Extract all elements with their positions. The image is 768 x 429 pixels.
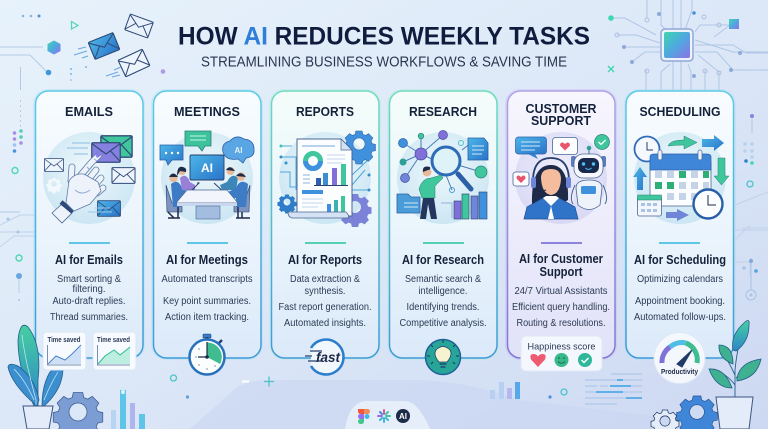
card title: Support [540,265,583,279]
bullet list: Thread summaries. [50,312,128,323]
bullet list: intelligence. [418,286,468,297]
bullet list: Optimizing calendars [637,274,723,285]
mini chart card: time saved blue: Time saved [48,337,80,344]
illustration: calendar with clocks and arrows [633,132,729,224]
bullet list: Efficient query handling. [512,302,610,313]
icon: fast badge [305,340,344,374]
icon: spark logo [378,410,390,422]
bullet list: Semantic search & [405,274,481,285]
panel: scheduling [624,89,736,360]
heading: research: RESEARCH [409,105,477,119]
icon: AI badge: AI [399,412,407,421]
icon: right gears [651,396,717,429]
bullet list [50,274,128,323]
illustration: report document with charts [277,131,376,227]
bullet list: Automated transcripts [162,274,252,285]
bullet list: Routing & resolutions. [516,318,606,329]
gauge: productivity: Productivity [661,369,698,376]
panel: reports [269,89,381,360]
icon: check [578,353,592,367]
logo strip [345,401,430,429]
bullet list: filtering. [72,284,106,295]
bullet list [512,286,610,329]
icon: right plant [709,321,761,429]
illustration: meeting around AI screen [160,131,254,224]
icon: design tool logo [358,409,370,424]
mini chart card: time saved green: Time saved [97,337,130,344]
bullet list: synthesis. [304,286,346,297]
bar chart: left decoration [111,390,145,429]
bullet list: Automated follow-ups. [634,312,726,323]
panel: meetings [151,89,263,360]
panel: customer support [505,89,617,360]
divider [423,242,464,244]
bullet list: Fast report generation. [278,302,372,313]
bullet list: Appointment booking. [635,296,725,307]
bullet list: Action item tracking. [165,312,249,323]
decoration: horizontal data bars [585,373,642,405]
panel: emails [33,89,145,360]
bullet list: Identifying trends. [406,302,480,313]
card title: AI for Customer [519,252,603,266]
heading: emails: EMAILS [65,105,113,119]
icon: left plant [8,325,63,429]
icon: stopwatch [190,334,224,374]
card title [519,252,603,279]
decoration: top left envelopes and nodes [0,14,165,173]
divider [187,242,228,244]
heading: customer support: CUSTOMER [526,102,596,116]
panel: research [387,89,499,360]
bullet list [162,274,252,323]
heading: scheduling: SCHEDULING [640,105,720,119]
icon: heart [530,354,546,367]
bullet list: Key point summaries. [163,296,251,307]
heading: meetings: MEETINGS [174,105,240,119]
illustration: meeting around AI screen: AI [201,161,213,175]
heading: reports: REPORTS [296,105,354,119]
bullet list: Data extraction & [290,274,360,285]
bullet list [634,274,726,323]
callout: happiness score: Happiness score [528,342,596,352]
decoration: small shapes [170,375,567,399]
icon: fast badge: fast [316,350,341,365]
card title: AI for Reports [288,253,362,267]
decoration: left side nodes [0,212,35,301]
bullet list [400,274,486,329]
divider [305,242,346,244]
bullet list: 24/7 Virtual Assistants [514,286,608,297]
divider [659,242,700,244]
bullet list: Auto-draft replies. [52,296,126,307]
callout: happiness score [521,336,602,371]
mini chart card: time saved green [93,332,136,370]
bullet list: Automated insights. [284,318,366,329]
icon: left gear [53,392,103,429]
card title: AI for Meetings [166,253,248,267]
decoration: right side nodes [735,114,768,300]
icon: lightbulb badge [426,340,460,374]
illustration: robot hand and envelopes [43,132,135,224]
bullet list: Smart sorting & [57,274,121,285]
heading: customer support: SUPPORT [531,114,591,128]
illustration: magnifier and research network [397,130,489,224]
divider [541,242,582,244]
card title: AI for Research [402,253,484,267]
card title: AI for Scheduling [634,253,726,267]
card title: AI for Emails [55,253,123,267]
bullet list [278,274,372,329]
bullet list: Competitive analysis. [400,318,486,329]
heading: customer support [526,102,596,128]
decoration: circuit board top right [608,0,768,90]
illustration: support agent and robot [513,132,610,224]
divider [69,242,110,244]
mini chart card: time saved blue [43,332,86,370]
icon: smile [554,353,568,367]
gauge: productivity [654,332,705,384]
illustration: meeting around AI screen: AI [234,146,242,155]
title: HOW AI REDUCES WEEKLY TASKS [178,22,590,50]
bar chart: centre decoration [490,382,520,399]
subtitle: STREAMLINING BUSINESS WORKFLOWS & SAVING TIME [201,54,567,70]
